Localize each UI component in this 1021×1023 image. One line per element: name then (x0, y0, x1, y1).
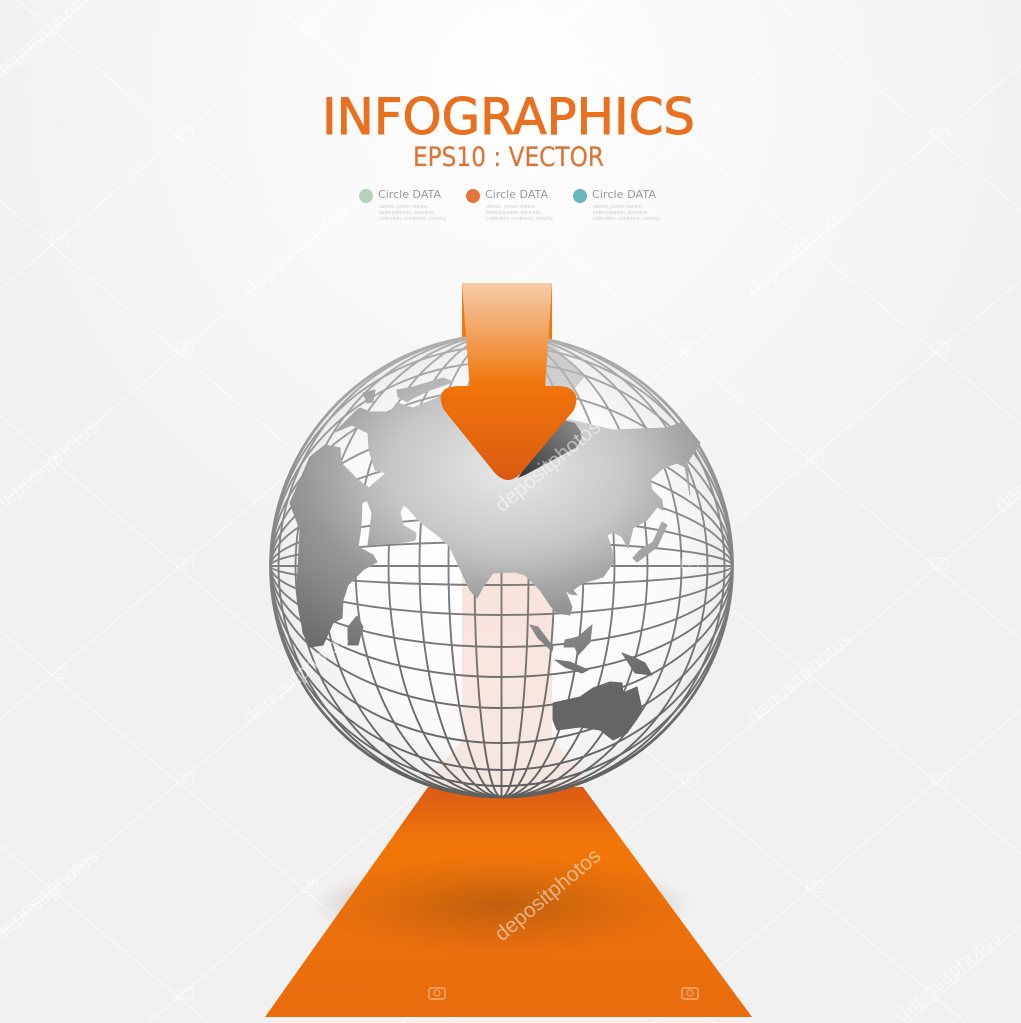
legend item: orange circle data: battery,banner, business, (486, 210, 542, 216)
arrow back strip (462, 283, 552, 339)
arrow head (441, 386, 576, 480)
madagascar (348, 616, 363, 645)
subtitle: EPS10 : VECTOR (413, 142, 604, 173)
globe (270, 335, 732, 800)
pale arrow trail through the globe (422, 572, 586, 796)
continents (290, 378, 700, 740)
legend item: teal circle data (573, 189, 661, 222)
watermark: depositphotos (490, 415, 605, 517)
arrow shaft (462, 283, 552, 390)
arrow (441, 283, 576, 480)
legend item: orange circle data (466, 189, 554, 222)
ground shadow outside the plate (312, 865, 692, 945)
japan (633, 522, 667, 562)
legend item: green circle data: atomic, power station, (379, 204, 429, 210)
legend item: teal circle data: atomic, power station, (593, 204, 643, 210)
legend item: orange circle data: atomic, power station, (486, 204, 536, 210)
watermark: depositphotos (742, 198, 857, 300)
legend item: green circle data: Circle DATA (378, 189, 442, 201)
legend item: orange circle data: Circle DATA (485, 189, 549, 201)
northern islands (397, 378, 453, 402)
globe interior (270, 335, 732, 797)
wire grid (270, 335, 732, 797)
java (555, 660, 588, 673)
legend item: orange circle data: collection, continent, country, (486, 216, 554, 222)
orange trapezoid base (265, 787, 752, 1017)
legend item: teal circle data: battery,banner, business, (593, 210, 649, 216)
legend item: teal circle data: Circle DATA (592, 189, 657, 201)
borneo (564, 625, 592, 655)
arrow shadow hole (518, 418, 583, 478)
shadow on the base (312, 855, 692, 955)
legend item: green circle data (359, 189, 447, 222)
watermark: depositphotos (238, 627, 353, 729)
new guinea (622, 653, 652, 675)
small arctic island (363, 390, 375, 403)
legend (359, 189, 661, 222)
sumatra (530, 625, 553, 651)
legend item: green circle data: battery,banner, business, (379, 210, 435, 216)
watermark: depositphotos (490, 844, 605, 946)
legend item: green circle data: collection, continent, country, (379, 216, 447, 222)
title: INFOGRAPHICS (322, 88, 695, 146)
legend item: teal circle data: collection, continent, country, (593, 216, 661, 222)
watermark: depositphotos (238, 198, 353, 300)
arrow side shade on globe (544, 336, 585, 392)
watermark: depositphotos (742, 627, 857, 729)
australia (553, 682, 642, 740)
eurasia and africa (290, 385, 700, 647)
